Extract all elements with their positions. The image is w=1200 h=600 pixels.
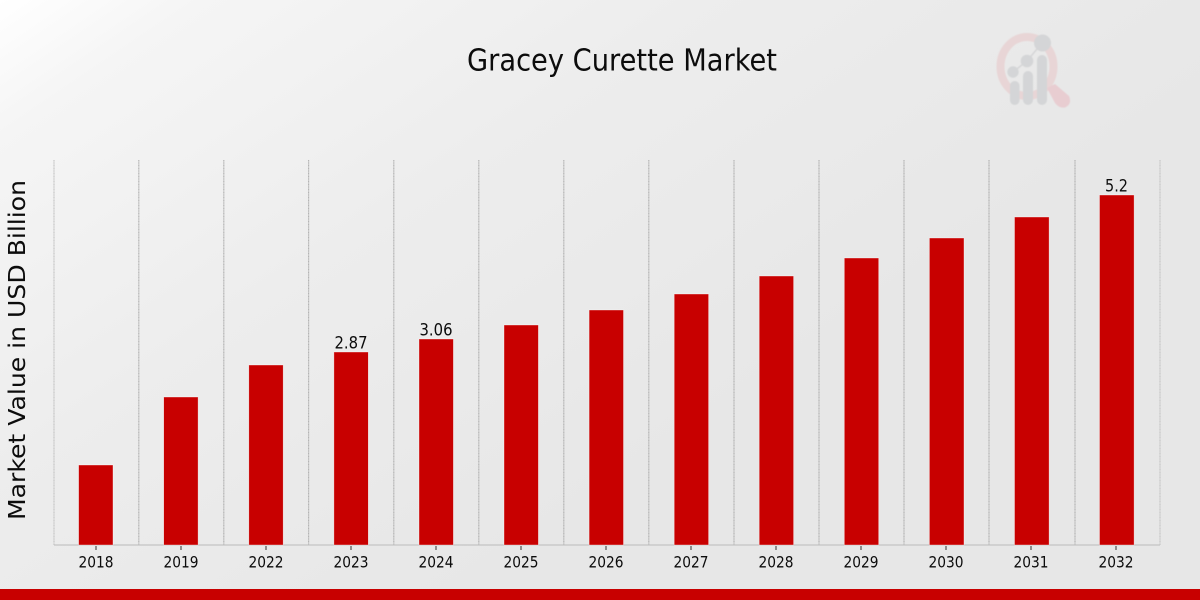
x axis labels: 2028	[758, 552, 794, 572]
value labels: 3.06	[420, 321, 452, 340]
y axis label: Market Value in USD Billion	[3, 180, 31, 520]
x axis labels: 2019	[164, 552, 198, 572]
x axis labels: 2024	[418, 552, 454, 572]
x axis labels: 2032	[1098, 552, 1134, 572]
icon: watermark logo	[1000, 34, 1070, 108]
value labels: 5.2	[1105, 176, 1128, 196]
title: Gracey Curette Market	[467, 44, 777, 78]
x axis labels: 2027	[674, 552, 708, 572]
x axis labels: 2031	[1014, 552, 1048, 572]
footer bar	[0, 589, 1200, 600]
x axis labels: 2026	[588, 552, 624, 572]
value labels	[334, 176, 1128, 353]
chart: bar chart	[54, 160, 1160, 572]
x axis labels: 2030	[928, 552, 964, 572]
x axis labels	[78, 552, 1134, 572]
value labels: 2.87	[334, 334, 368, 353]
x axis labels: 2022	[248, 552, 284, 572]
x axis labels: 2025	[504, 552, 538, 572]
x axis labels: 2029	[844, 552, 878, 572]
x axis labels: 2023	[334, 552, 368, 572]
x axis labels: 2018	[78, 552, 114, 572]
